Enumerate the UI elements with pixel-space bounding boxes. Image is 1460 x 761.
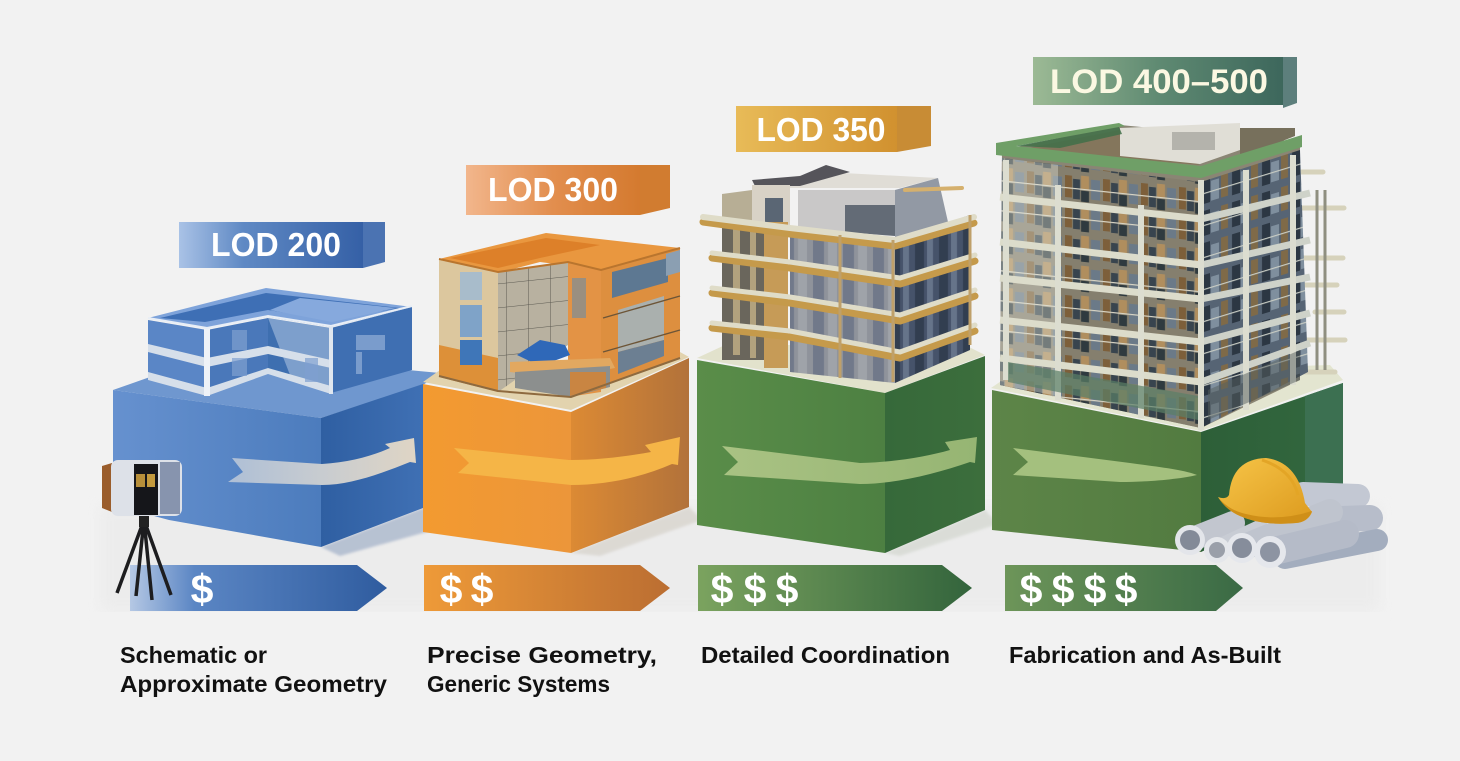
cost arrow: $$$ (698, 565, 972, 612)
balcony apartment building (703, 165, 975, 383)
ground floor glazing (1008, 362, 1198, 420)
curved arrow on green block (722, 437, 977, 484)
cost arrow: $$$: $ (744, 566, 767, 612)
caption: LOD 200: Approximate Geometry (120, 671, 387, 697)
pale glass on left bay (1000, 158, 1058, 396)
icon: yellow hard hat (1218, 458, 1312, 524)
cost arrow: $$: $ (471, 566, 494, 612)
column: LOD 200 (102, 222, 440, 697)
column: LOD 400-500 (991, 57, 1377, 668)
label: LOD 300 (466, 165, 670, 215)
curved arrow on blue block (228, 438, 416, 485)
caption: LOD 300: Precise Geometry, (427, 642, 657, 668)
dark green base block (991, 365, 1343, 552)
cost arrow: $$$: $ (776, 566, 799, 612)
cost arrow: $ (130, 565, 387, 612)
caption: LOD 200: Schematic or (120, 642, 267, 668)
columns (1006, 155, 1293, 430)
label: LOD 350: LOD 350 (756, 111, 886, 148)
caption: LOD 400-500: Fabrication and As-Built (1009, 642, 1281, 668)
floor slabs, left face (1000, 197, 1201, 382)
cost arrow: $$: $ (440, 566, 463, 612)
blue base block (113, 360, 440, 547)
blue massing building (148, 288, 412, 396)
caption: LOD 350: Detailed Coordination (701, 642, 950, 668)
cost arrow: $$$$ (1005, 565, 1243, 612)
label: LOD 350 (736, 106, 931, 152)
cost arrow: $: $ (191, 566, 214, 612)
cost arrow: $$$$: $ (1115, 566, 1138, 612)
label: LOD 400–500: LOD 400–500 (1050, 63, 1268, 101)
curved arrow on orange block (454, 437, 680, 485)
label: LOD 200 (179, 222, 385, 268)
cost arrow: $$ (424, 565, 670, 612)
cost arrow: $$$: $ (711, 566, 734, 612)
windows on orange wall (603, 250, 680, 374)
icon: laser scanner on tripod (102, 460, 182, 600)
green roof rim (996, 123, 1302, 178)
label: LOD 300: LOD 300 (488, 171, 618, 208)
orange detailed building (439, 233, 680, 397)
cost arrow: $$$$: $ (1084, 566, 1107, 612)
green base block (697, 345, 985, 553)
icon: rolled blueprints (1175, 494, 1377, 568)
column: LOD 300 (423, 165, 689, 697)
floor slabs, right face (1201, 193, 1310, 382)
side balconies and pipes (1290, 172, 1345, 372)
label: LOD 400–500 (1033, 57, 1297, 108)
column: LOD 350 (697, 106, 985, 668)
pennant arrow on base block (1013, 448, 1197, 482)
cost arrow: $$$$: $ (1020, 566, 1043, 612)
orange base block (423, 352, 689, 553)
rooftop interior and penthouse (1018, 123, 1295, 165)
caption: LOD 300: Generic Systems (427, 671, 610, 697)
exposed BIM building (996, 123, 1345, 430)
label: LOD 200: LOD 200 (211, 226, 341, 263)
floor (90, 505, 1390, 652)
slabs (703, 217, 975, 358)
penthouse (722, 165, 962, 238)
cost arrow: $$$$: $ (1052, 566, 1075, 612)
